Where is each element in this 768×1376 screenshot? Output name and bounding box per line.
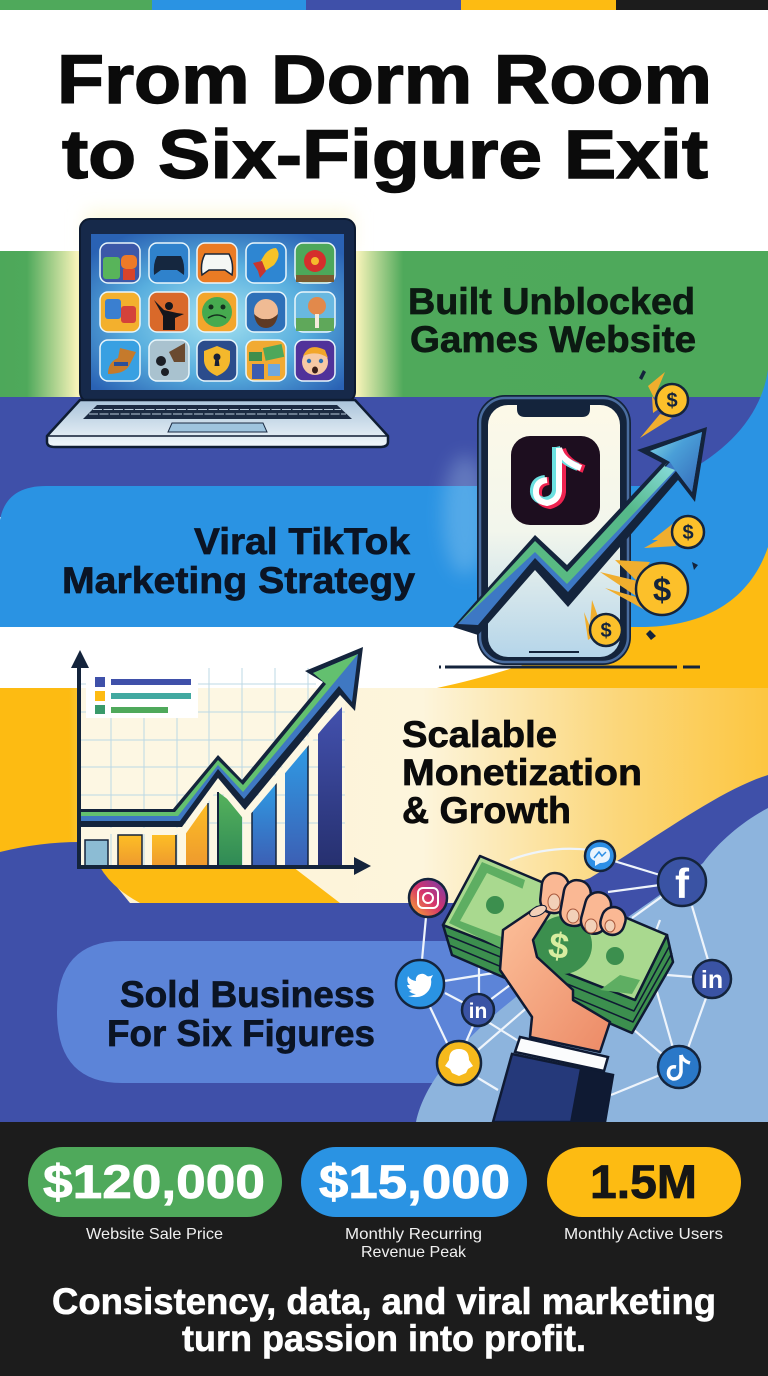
network lines	[422, 849, 708, 1095]
app icon: dark gamepad	[149, 243, 189, 283]
stat label	[345, 1226, 482, 1261]
band: yellow cream	[0, 688, 768, 918]
bar chart	[71, 647, 371, 875]
stat label: Monthly Active Users	[564, 1226, 723, 1243]
finger	[597, 904, 629, 938]
finger nail	[585, 919, 597, 933]
heading: step 1: Games Website	[410, 319, 696, 360]
section backgrounds	[0, 212, 768, 1122]
stat: monthly active users	[547, 1147, 741, 1243]
stat label: Website Sale Price	[86, 1226, 223, 1243]
app icon: rocket	[246, 243, 286, 283]
icon: twitter	[396, 960, 444, 1008]
app icon: map and character	[100, 243, 140, 283]
stat value: $120,000	[43, 1155, 265, 1208]
shirt cuff	[515, 1037, 608, 1071]
app icon: red flower	[295, 243, 335, 283]
stat value: 1.5M	[590, 1155, 697, 1208]
social network and cash illustration	[396, 841, 731, 1122]
stat pill blue	[301, 1147, 527, 1217]
title	[57, 41, 712, 193]
finger nail	[548, 894, 560, 910]
band: light blue panel	[57, 941, 560, 1083]
stat label: Monthly Recurring	[345, 1226, 482, 1243]
glow behind laptop	[86, 212, 352, 252]
laptop base	[47, 400, 388, 447]
icon: linkedin small	[462, 994, 494, 1026]
closing statement: turn passion into profit.	[182, 1318, 586, 1359]
ground line	[439, 666, 700, 668]
coin large	[636, 563, 688, 615]
hand	[500, 872, 629, 1052]
app icon: block characters	[100, 292, 140, 332]
home bar	[529, 651, 579, 653]
heading: step 4: For Six Figures	[107, 1013, 375, 1054]
stat label: Revenue Peak	[361, 1244, 467, 1261]
heading: step 2: Marketing Strategy	[62, 560, 415, 601]
laptop illustration	[47, 219, 388, 447]
band: indigo	[0, 397, 768, 517]
app icon: shield	[197, 340, 237, 381]
phone notch	[517, 405, 590, 417]
icon: instagram	[409, 879, 447, 917]
coin: $	[682, 522, 694, 544]
laptop screen	[91, 234, 344, 390]
cream edge beneath arrow	[81, 701, 342, 831]
finger	[578, 889, 614, 937]
app icon: bearded man	[246, 292, 286, 332]
icon: snapchat	[437, 1041, 481, 1085]
coin	[656, 384, 688, 416]
heading: step 2	[62, 521, 415, 601]
closing statement: Consistency, data, and viral marketing	[52, 1281, 716, 1322]
coin cluster	[584, 370, 704, 646]
chart legend	[86, 668, 198, 718]
coin large: $	[653, 571, 671, 608]
money stack	[443, 856, 673, 1033]
touchpad	[168, 423, 267, 432]
heading: step 1: Built Unblocked	[408, 281, 695, 322]
coin	[590, 614, 622, 646]
app icon: silhouette	[149, 292, 189, 332]
app icon: orange animal	[100, 340, 140, 381]
icon: facebook: f	[675, 860, 690, 907]
stat: website sale price	[28, 1147, 282, 1243]
coin: $	[600, 620, 612, 642]
heading: step 4	[107, 974, 375, 1054]
app icon: green face	[197, 292, 237, 332]
app icon: smoke scene	[149, 340, 189, 381]
app icon: white gamepad	[197, 243, 237, 283]
suit sleeve	[493, 1054, 613, 1122]
finger nail	[567, 909, 579, 923]
phone screen	[488, 405, 620, 657]
coin sparks	[584, 372, 676, 640]
laptop keyboard	[83, 405, 352, 419]
stat: monthly recurring revenue	[301, 1147, 527, 1261]
icon: tiktok	[658, 1046, 700, 1088]
laptop front edge	[48, 435, 387, 437]
footer panel	[0, 1122, 768, 1376]
band: yellow curve	[437, 547, 768, 700]
closing statement	[52, 1281, 716, 1359]
tiktok app icon	[511, 436, 600, 525]
phone illustration	[439, 370, 707, 667]
app icon: money	[246, 340, 286, 381]
title: From Dorm Room	[57, 41, 712, 118]
glow behind phone	[443, 455, 487, 575]
stat pill green	[28, 1147, 282, 1217]
band: green	[0, 251, 768, 398]
heading: step 2: Viral TikTok	[194, 521, 410, 562]
icon: linkedin: in	[701, 966, 723, 994]
chart axes	[71, 650, 371, 875]
icon: facebook	[658, 858, 706, 907]
finger	[558, 878, 593, 928]
band: indigo lower	[0, 775, 768, 1122]
band: white	[0, 627, 768, 688]
coin	[672, 516, 704, 548]
coin: $	[666, 390, 678, 412]
heading: step 1	[408, 281, 696, 360]
band: pale blue blob	[416, 808, 768, 1122]
thumb nail	[528, 903, 548, 919]
heading: step 3: Scalable	[402, 714, 557, 755]
app icon: cartoon face	[295, 340, 335, 381]
bars	[85, 707, 342, 866]
heading: step 3: & Growth	[402, 790, 571, 831]
band: blue right curve	[600, 370, 768, 627]
finger nail	[605, 920, 615, 932]
laptop lid	[80, 219, 355, 402]
growth arrow	[453, 427, 707, 635]
stat value: $15,000	[319, 1155, 510, 1208]
top colour stripe	[0, 0, 768, 10]
stat pill yellow	[547, 1147, 741, 1217]
heading: step 3	[402, 714, 642, 831]
finger	[539, 872, 570, 914]
band: yellow blob under chart	[100, 867, 340, 903]
band: blue panel	[0, 486, 640, 627]
bill details: $	[546, 924, 572, 967]
bill details	[449, 862, 640, 994]
heading: step 3: Monetization	[402, 752, 642, 793]
icon: messenger	[585, 841, 615, 871]
icon: linkedin small: in	[469, 1000, 487, 1023]
growth arrow	[79, 647, 363, 827]
icon: linkedin	[693, 960, 731, 998]
chart grid	[80, 668, 345, 866]
phone body	[477, 395, 631, 665]
title: to Six-Figure Exit	[62, 116, 708, 193]
app icon: lollipop character	[295, 292, 335, 332]
heading: step 4: Sold Business	[120, 974, 375, 1015]
